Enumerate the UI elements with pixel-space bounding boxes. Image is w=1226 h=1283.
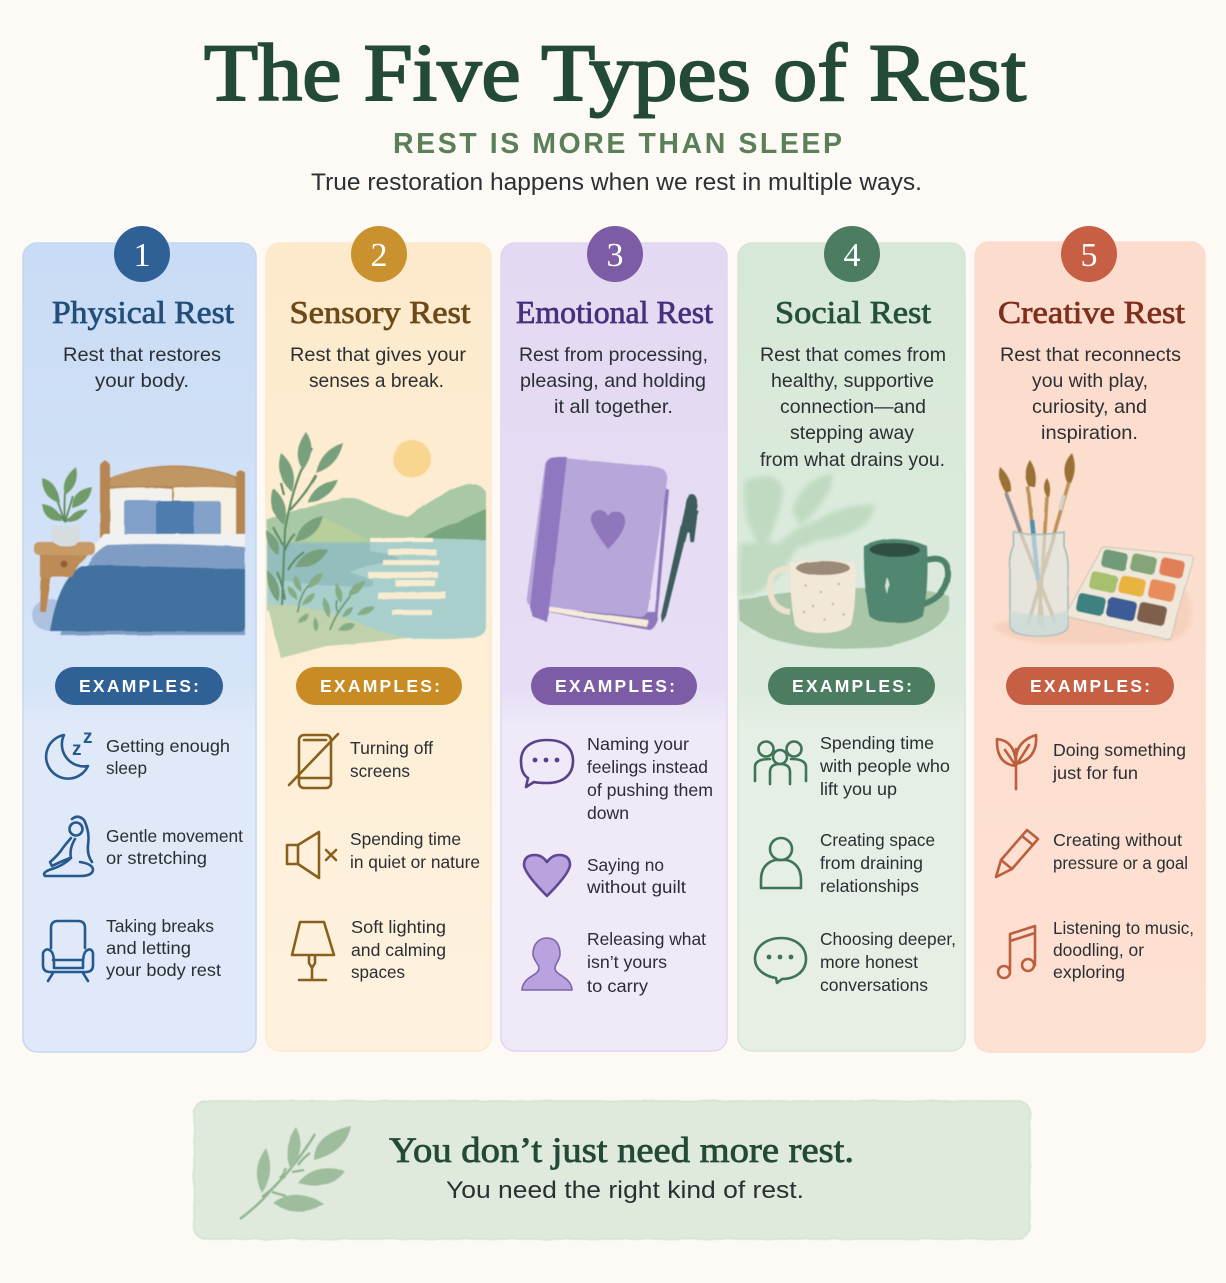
heading: Social Rest: [775, 294, 931, 330]
icon: single person: [761, 838, 801, 888]
description: curiosity, and: [1032, 396, 1147, 418]
examples pill: EXAMPLES:: [320, 676, 440, 696]
description: [519, 344, 708, 418]
example: breaks: [106, 916, 221, 980]
example: naming feelings: [587, 734, 713, 823]
heading: Emotional Rest: [516, 294, 713, 330]
icon: moon and zzz: z: [72, 739, 82, 760]
number badge 2: 2: [370, 237, 388, 274]
illustration: journal and pen: [527, 457, 698, 630]
number badge 5: 5: [1080, 237, 1098, 274]
example: space: relationships: [820, 876, 919, 896]
example: quiet: Spending time: [350, 829, 461, 849]
example: screens: [350, 738, 433, 781]
number badge 2: [351, 226, 407, 282]
example: people: with people who: [819, 756, 950, 776]
description: [1000, 344, 1181, 444]
description: [760, 344, 946, 471]
examples pill: EXAMPLES:: [555, 676, 675, 696]
icon: pencil: [996, 830, 1038, 877]
number badge 4: [824, 226, 880, 282]
example: creating: Creating without: [1053, 830, 1182, 850]
example: saying no: Saying no: [587, 855, 664, 875]
example: fun: [1052, 740, 1186, 783]
panel: emotional rest: [501, 226, 727, 1051]
icon: music notes: [998, 926, 1035, 978]
example: lighting: and calming: [351, 940, 446, 960]
number badge 5: [1061, 226, 1117, 282]
example: naming feelings: Naming your: [587, 734, 689, 754]
illustration: lake landscape: [266, 432, 486, 658]
examples pill: EXAMPLES:: [792, 676, 912, 696]
heading: Creative Rest: [998, 294, 1185, 330]
description: healthy, supportive: [771, 370, 934, 392]
examples pill: [55, 667, 223, 705]
number badge 3: [587, 226, 643, 282]
example: naming feelings: down: [587, 803, 629, 823]
example: space: from draining: [820, 853, 923, 873]
example: space: Creating space: [820, 830, 935, 850]
example: space: [820, 830, 935, 896]
icon: person silhouette: [522, 938, 572, 990]
icon: moon and zzz: [46, 727, 92, 779]
example: saying no: without guilt: [586, 877, 686, 897]
example: music: exploring: [1053, 962, 1125, 982]
example: lighting: [351, 917, 446, 982]
number badge 1: 1: [134, 237, 150, 274]
example: screens: screens: [350, 761, 410, 781]
description: your body.: [95, 370, 189, 392]
example: stretching: Gentle movement: [106, 826, 243, 846]
description: Rest that gives your: [290, 344, 467, 366]
example: lighting: spaces: [351, 962, 405, 982]
description: Rest from processing,: [519, 344, 708, 366]
icon: armchair: [43, 921, 93, 981]
example: people: [819, 733, 950, 799]
examples pill: [768, 667, 935, 705]
example: conversations: [820, 929, 956, 995]
illustration: brushes and paint palette: [990, 453, 1193, 644]
example: creating: pressure or a goal: [1053, 853, 1188, 873]
icon: stretching figure: [44, 817, 93, 876]
example: releasing: isn’t yours: [587, 952, 667, 972]
example: screens: Turning off: [350, 738, 433, 758]
panel: social rest: [738, 226, 965, 1051]
title: The Five Types of Rest: [204, 27, 1026, 118]
example: quiet: in quiet or nature: [350, 852, 480, 872]
icon: phone crossed out: [289, 734, 338, 788]
description: stepping away: [790, 422, 914, 444]
icon: speech bubble: [755, 938, 806, 983]
description: inspiration.: [1041, 422, 1138, 444]
example: breaks: Taking breaks: [106, 916, 214, 936]
number badge 3: 3: [606, 237, 624, 274]
example: releasing: [587, 929, 706, 996]
example: sleep: sleep: [106, 758, 147, 778]
example: conversations: more honest: [820, 952, 918, 972]
example: creating: [1053, 830, 1188, 873]
example: releasing: to carry: [587, 976, 648, 996]
number badge 1: [114, 226, 170, 282]
description: pleasing, and holding: [520, 370, 706, 392]
description: Rest that reconnects: [1000, 344, 1181, 366]
illustration: two mugs: [739, 473, 950, 649]
example: sleep: Getting enough: [106, 736, 230, 756]
example: quiet: [350, 829, 480, 872]
icon: group of people: [755, 742, 806, 784]
heading: Physical Rest: [52, 294, 234, 330]
icon: moon and zzz: z: [83, 727, 92, 748]
description: from what drains you.: [760, 449, 945, 471]
panel: physical rest: [23, 226, 256, 1052]
icon: lamp: [292, 922, 334, 980]
icon: heart: [524, 855, 570, 896]
example: people: Spending time: [820, 733, 934, 753]
example: lighting: Soft lighting: [351, 917, 446, 937]
banner subtext: You need the right kind of rest.: [446, 1177, 804, 1204]
example: music: doodling, or: [1053, 940, 1144, 960]
description: you with play,: [1032, 370, 1148, 392]
example: stretching: [106, 826, 243, 868]
description: senses a break.: [309, 370, 444, 392]
examples pill: [296, 667, 462, 705]
subtitle: REST IS MORE THAN SLEEP: [393, 128, 842, 160]
description: connection—and: [780, 396, 926, 418]
number badge 4: 4: [844, 237, 860, 274]
panel: sensory rest: [266, 226, 491, 1051]
illustration: bed and plant: [32, 461, 245, 635]
description: Rest that restores: [63, 344, 221, 366]
icon: speech bubble: [521, 740, 573, 787]
example: sleep: [106, 736, 230, 778]
example: breaks: and letting: [106, 938, 191, 958]
intro sentence: True restoration happens when we rest in multiple ways.: [311, 169, 922, 196]
example: releasing: Releasing what: [587, 929, 706, 949]
description: Rest that comes from: [760, 344, 946, 366]
example: fun: just for fun: [1052, 763, 1138, 783]
example: conversations: Choosing deeper,: [820, 929, 956, 949]
banner: closing message: [194, 1101, 1030, 1239]
description: it all together.: [554, 396, 673, 418]
icon: muted speaker: [287, 832, 336, 878]
example: people: lift you up: [820, 779, 897, 799]
example: naming feelings: feelings instead: [587, 757, 708, 777]
examples pill: EXAMPLES:: [79, 676, 199, 696]
banner heading: You don’t just need more rest.: [389, 1130, 854, 1170]
description: [290, 344, 467, 392]
description: [63, 344, 221, 392]
heading: Sensory Rest: [290, 294, 471, 330]
examples pill: [1006, 667, 1174, 705]
icon: leafy sprig: [240, 1126, 351, 1219]
example: naming feelings: of pushing them: [587, 780, 713, 800]
example: stretching: or stretching: [106, 848, 207, 868]
example: music: Listening to music,: [1053, 918, 1194, 938]
example: fun: Doing something: [1053, 740, 1186, 760]
panel: creative rest: [975, 226, 1205, 1052]
example: saying no: [586, 855, 686, 897]
examples pill: EXAMPLES:: [1030, 676, 1150, 696]
example: conversations: conversations: [820, 975, 928, 995]
example: breaks: your body rest: [106, 960, 221, 980]
examples pill: [531, 667, 697, 705]
icon: sprout: [997, 735, 1036, 789]
example: music: [1053, 918, 1194, 982]
